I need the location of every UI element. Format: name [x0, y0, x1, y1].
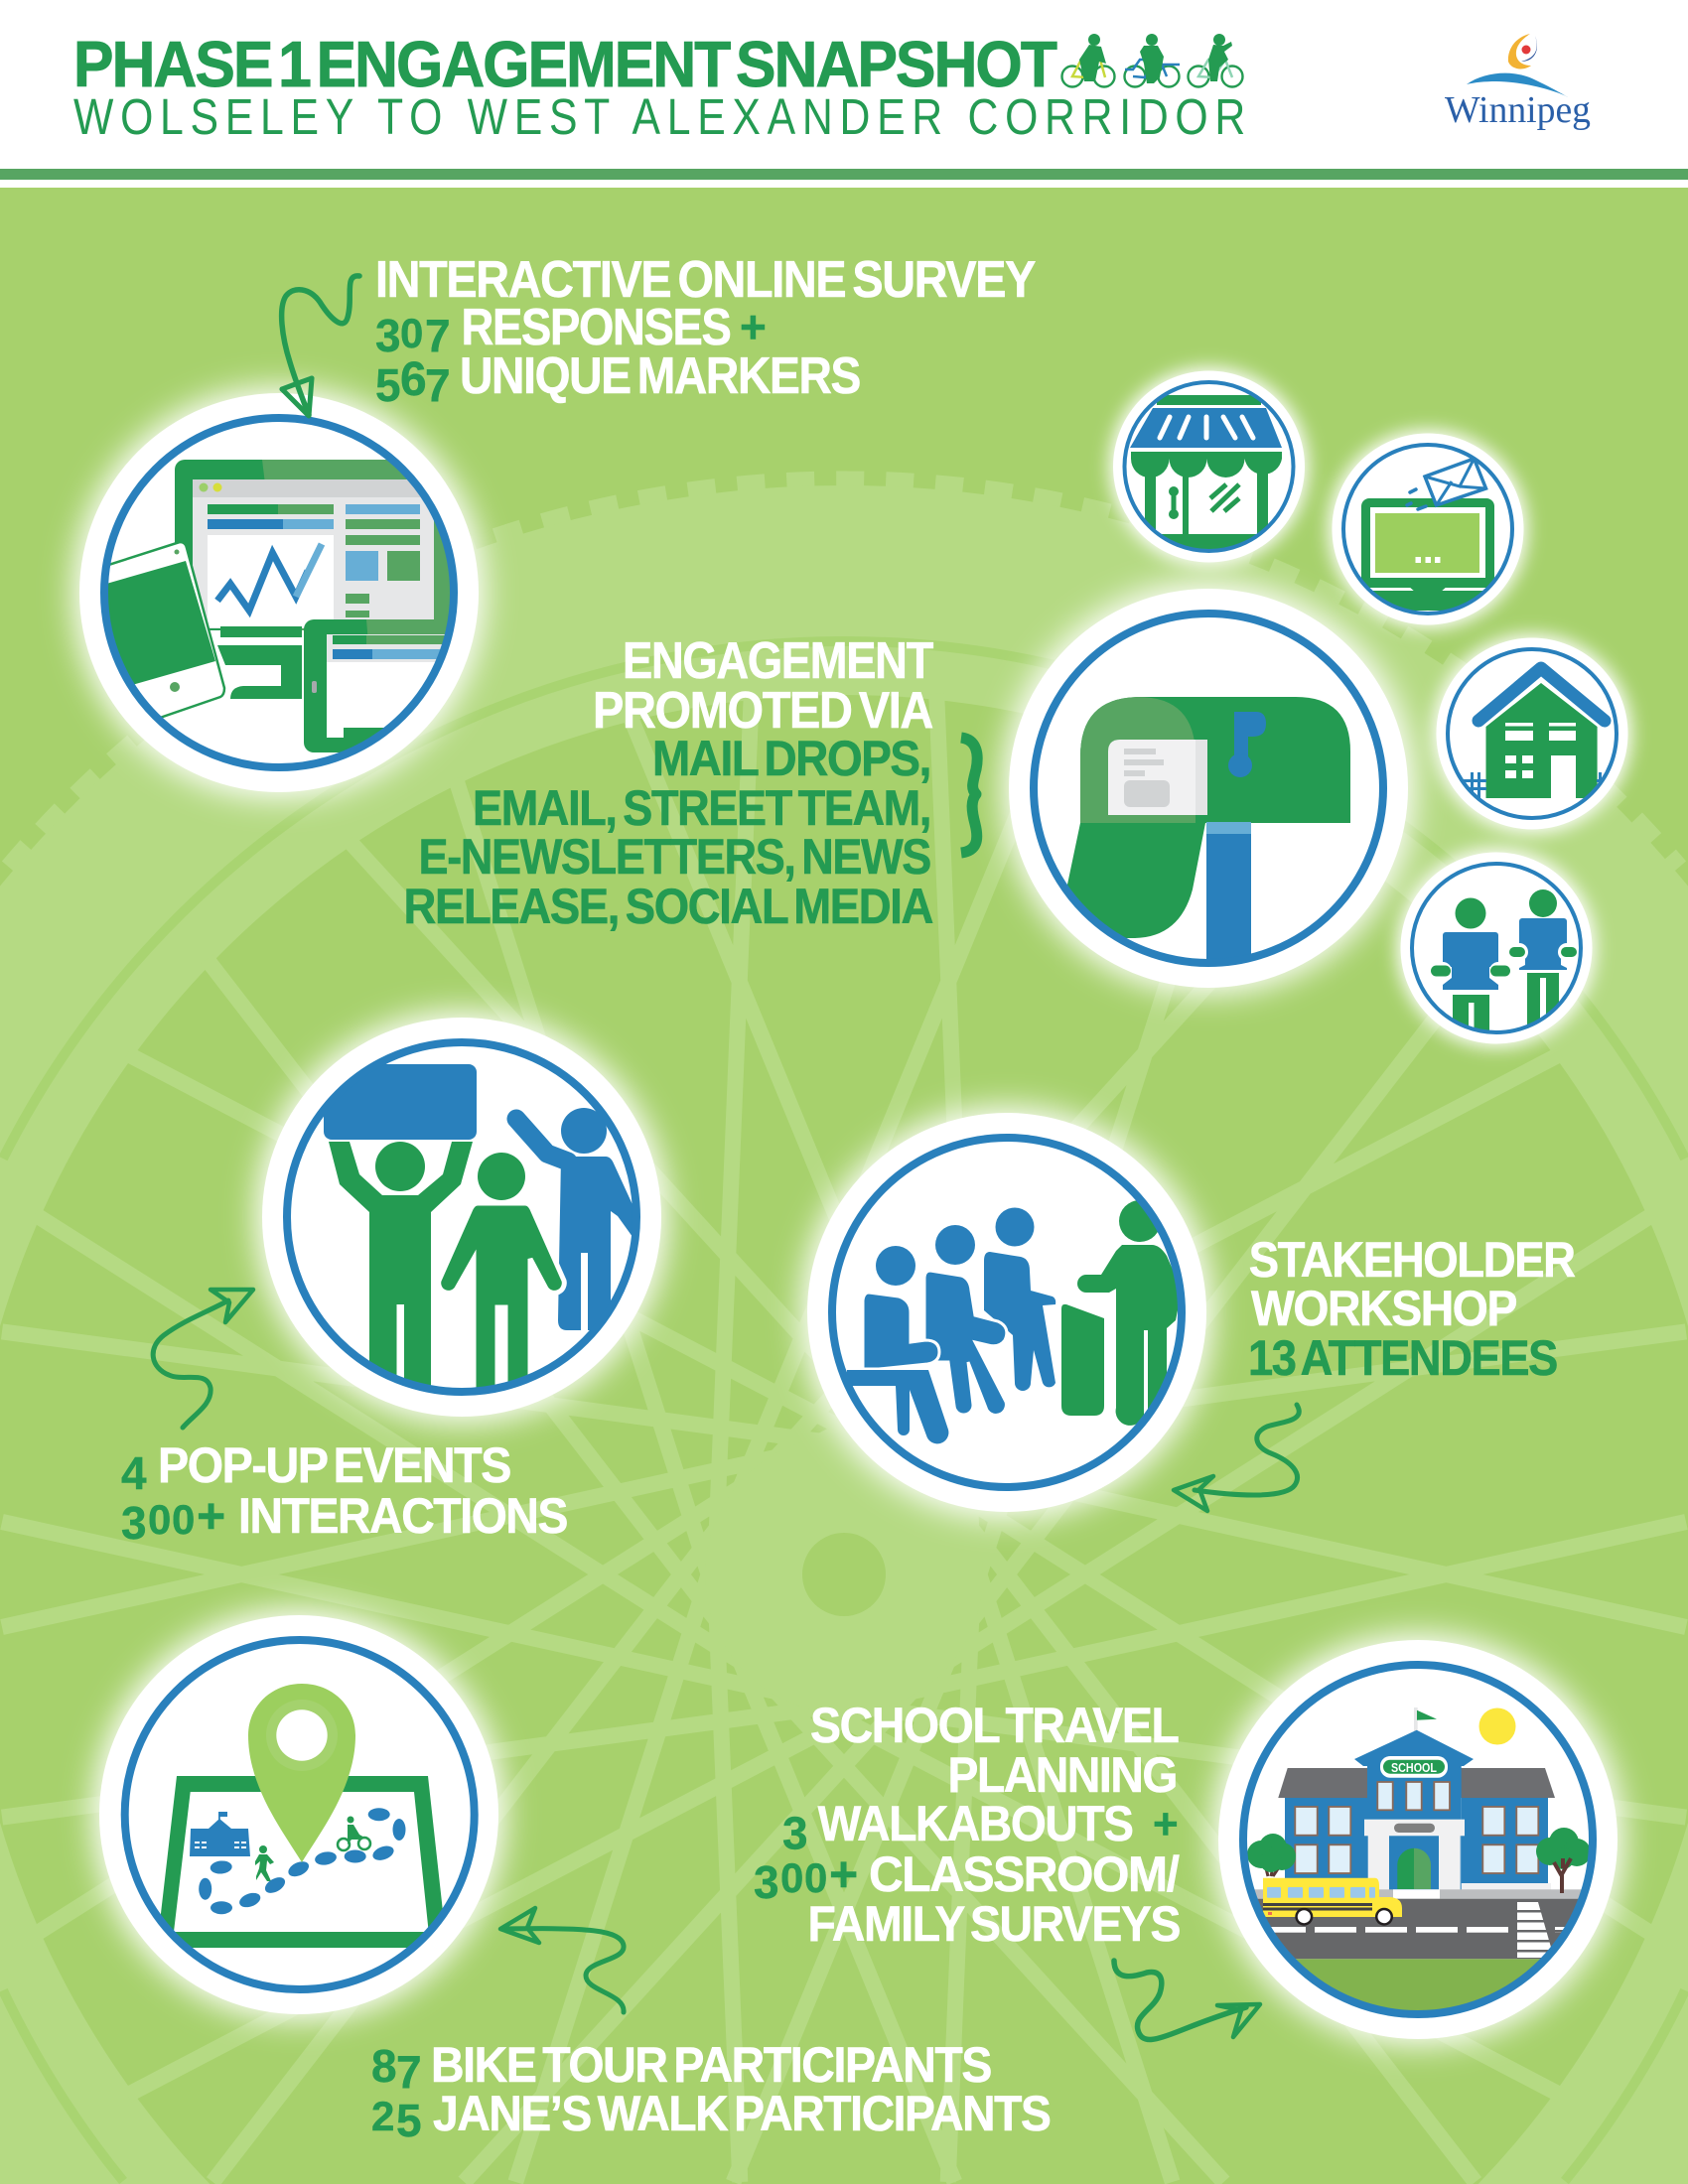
panel: online survey icon — [73, 387, 485, 798]
panel: workshop icon — [801, 1107, 1212, 1518]
panel: email icon — [1329, 430, 1527, 628]
header band — [0, 0, 1688, 188]
panel: school icon: SCHOOL — [1391, 1760, 1437, 1775]
text: pop-up events — [121, 1437, 567, 1549]
text: school travel planning: WALKABOUTS — [818, 1796, 1133, 1851]
text: stakeholder workshop: STAKEHOLDER — [1249, 1232, 1576, 1288]
text: school travel planning: 3 — [754, 1856, 779, 1908]
text: stakeholder workshop: WORKSHOP — [1251, 1281, 1516, 1336]
text: school travel planning: + — [829, 1846, 858, 1902]
heading: online survey — [375, 251, 1036, 411]
text: engagement promoted via: PROMOTED VIA — [593, 682, 933, 740]
text: bike tour and Jane's walk: JANE’S WALK PARTICIPANTS — [433, 2086, 1051, 2141]
text: school travel planning: CLASSROOM/ — [869, 1846, 1180, 1902]
arrow: to survey — [282, 276, 359, 416]
text: school travel planning: 0 — [804, 1854, 827, 1901]
heading: online survey: RESPONSES — [461, 299, 731, 356]
logo: Winnipeg: Winnipeg — [1445, 89, 1591, 131]
text: bike tour and Jane's walk: 5 — [396, 2095, 422, 2146]
text: school travel planning: SCHOOL TRAVEL — [810, 1698, 1178, 1753]
arrow: to pop-up events — [153, 1290, 253, 1428]
icon: three cyclists — [1062, 34, 1243, 87]
arrow: to bike tour — [500, 1908, 624, 2012]
arrow: to workshop — [1174, 1405, 1299, 1511]
text: engagement promoted via: EMAIL, STREET TEAM, — [473, 780, 930, 836]
small school — [190, 1812, 250, 1856]
middle seated figure — [935, 1225, 975, 1265]
arrow: to school — [1114, 1961, 1260, 2039]
title: PHASE 1 ENGAGEMENT SNAPSHOT — [73, 28, 1056, 100]
text: bike tour and Jane's walk: 8 — [371, 2040, 397, 2092]
back seated figure — [995, 1207, 1035, 1247]
text: engagement promoted via — [403, 632, 934, 934]
heading: online survey: INTERACTIVE ONLINE SURVEY — [375, 251, 1036, 309]
text: pop-up events: 0 — [148, 1496, 171, 1543]
text: school travel planning: 3 — [782, 1808, 808, 1859]
panel: pop-up events icon — [256, 1012, 667, 1423]
map pin — [248, 1684, 355, 1862]
heading: online survey: 0 — [400, 310, 423, 356]
heading: online survey: 6 — [400, 353, 427, 406]
panel: house icon — [1433, 634, 1631, 833]
brace — [961, 738, 977, 853]
text: school travel planning — [754, 1698, 1180, 1952]
logo: Winnipeg — [1445, 34, 1591, 131]
text: engagement promoted via: E-NEWSLETTERS, NEWS — [419, 829, 930, 885]
trees — [1247, 1834, 1296, 1876]
text: school travel planning: PLANNING — [947, 1747, 1177, 1803]
heading: online survey: 3 — [375, 310, 401, 361]
text: pop-up events: + — [197, 1488, 225, 1544]
heading: online survey: 7 — [425, 310, 451, 361]
panel: street team icon — [1397, 849, 1596, 1047]
dotted route — [199, 1808, 405, 1914]
text: engagement promoted via: RELEASE, SOCIAL MEDIA — [403, 879, 932, 934]
text: stakeholder workshop — [1248, 1232, 1576, 1386]
background: bicycle wheel gear — [0, 478, 1688, 2184]
person with raised arm — [516, 1108, 635, 1330]
text: pop-up events: INTERACTIONS — [238, 1488, 567, 1544]
walker — [255, 1845, 274, 1881]
text: stakeholder workshop: 13 ATTENDEES — [1248, 1330, 1557, 1386]
text: engagement promoted via: ENGAGEMENT — [623, 632, 934, 690]
text: bike tour and Jane's walk: 7 — [396, 2046, 422, 2098]
subtitle: WOLSELEY TO WEST ALEXANDER CORRIDOR — [73, 88, 1252, 145]
front seated figure — [876, 1246, 915, 1286]
heading: online survey: 7 — [425, 359, 451, 411]
heading: online survey: UNIQUE MARKERS — [460, 347, 860, 405]
text: pop-up events: POP-UP EVENTS — [158, 1437, 510, 1493]
text: pop-up events: 0 — [172, 1496, 195, 1543]
text: school travel planning: 0 — [780, 1854, 803, 1901]
text: bike tour and Jane's walk — [371, 2037, 1051, 2146]
text: pop-up events: 4 — [121, 1447, 147, 1499]
panel: mailbox icon — [1003, 583, 1414, 994]
text: school travel planning: FAMILY SURVEYS — [808, 1896, 1180, 1952]
heading: online survey: 5 — [375, 359, 401, 411]
heading: online survey: + — [740, 301, 767, 352]
text: school travel planning: + — [1153, 1800, 1179, 1848]
text: pop-up events: 3 — [121, 1497, 147, 1549]
text: bike tour and Jane's walk: 2 — [371, 2093, 394, 2139]
bus — [1263, 1878, 1402, 1926]
rider — [338, 1817, 370, 1850]
text: bike tour and Jane's walk: BIKE TOUR PARTICIPANTS — [431, 2037, 991, 2093]
panel: bike tour map icon — [93, 1609, 504, 2020]
text: engagement promoted via: MAIL DROPS, — [652, 731, 930, 786]
panel: store icon — [1110, 367, 1309, 566]
panel: school icon — [1212, 1634, 1623, 2045]
